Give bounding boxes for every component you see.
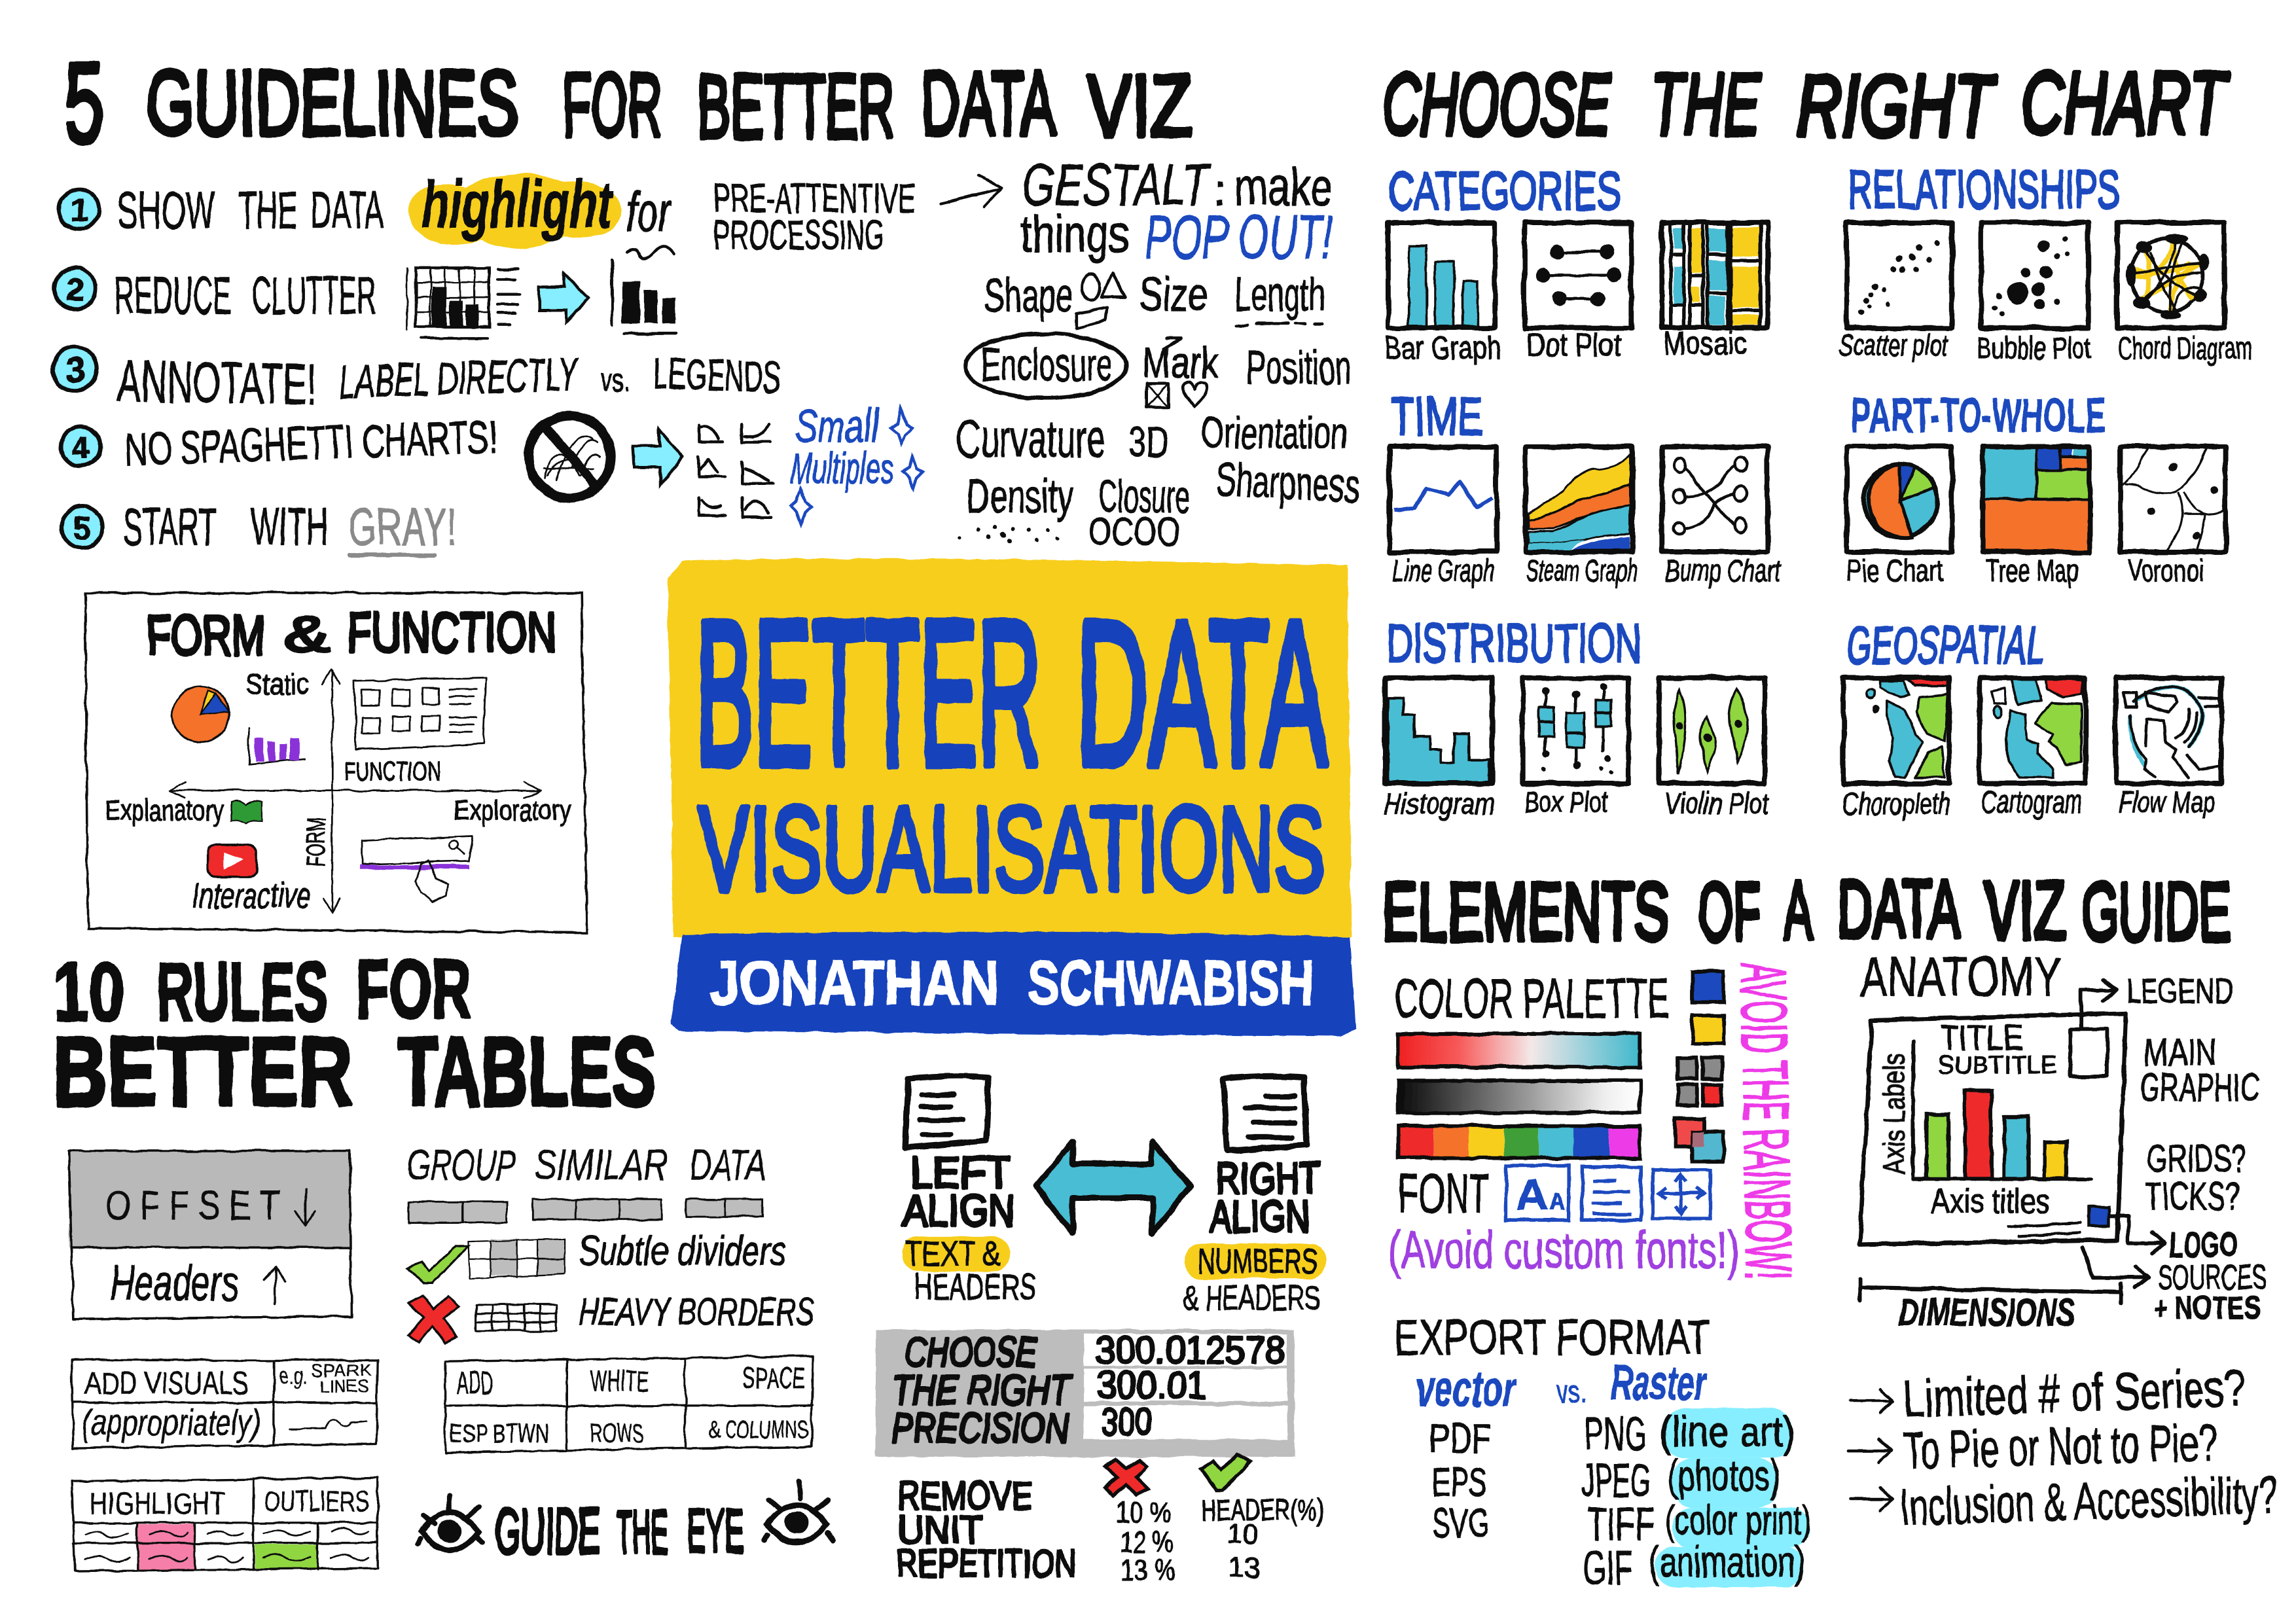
heading: 10 rules for better tables: FOR <box>356 943 471 1036</box>
heading: choose the right chart: RIGHT <box>1797 57 1997 155</box>
icon: text align box <box>1582 1167 1641 1220</box>
chart: violin plot: Violin Plot <box>1665 786 1770 821</box>
heading: choose the right chart: CHOOSE <box>1382 56 1611 154</box>
panel: form and function: FORM <box>302 817 331 866</box>
heading: 5 guidelines for better data viz: 5 <box>64 39 104 166</box>
chart: steam graph <box>1526 446 1637 588</box>
panel: guideline 1 show the data: THE <box>239 181 297 240</box>
text and icons: guide the eye: EYE <box>687 1496 744 1565</box>
panel: guideline 5 start with gray: 5 <box>73 510 91 546</box>
panel: guideline 3 annotate: ANNOTATE! <box>117 348 317 417</box>
text: gestalt make things pop out: GESTALT <box>1022 152 1211 217</box>
panel: guideline 3 annotate: LABEL DIRECTLY <box>338 348 581 409</box>
panel: choose the right precision <box>876 1329 1295 1457</box>
panel: right align: & HEADERS <box>1183 1278 1320 1317</box>
panel: export format: TIFF <box>1587 1499 1655 1551</box>
chart: scatter plot: Scatter plot <box>1839 328 1948 363</box>
heading: 5 guidelines for better data viz: BETTER <box>697 56 895 157</box>
panel: export format: (line art) <box>1659 1407 1795 1456</box>
panel: guideline 3 annotate: 3 <box>66 351 86 390</box>
panel: form and function: Exploratory <box>454 794 571 827</box>
yellow highlight <box>1185 1243 1326 1279</box>
icon: bar chart <box>249 728 304 764</box>
panel: group similar data: SIMILAR <box>535 1141 668 1190</box>
chart: line graph <box>1390 446 1496 588</box>
section: relationships: RELATIONSHIPS <box>1848 159 2121 220</box>
heading: 10 rules for better tables <box>53 943 656 1126</box>
chart: choropleth <box>1842 678 1950 821</box>
panel: guideline 2 reduce clutter: 2 <box>66 272 84 308</box>
panel: gestalt attributes: Mark <box>1142 338 1219 387</box>
panel: export format <box>1394 1310 1811 1595</box>
arrow: question 2 <box>1848 1439 1892 1463</box>
panel: anatomy of a chart: ANATOMY <box>1859 946 2062 1008</box>
mini table heavy <box>476 1304 556 1331</box>
chart: pie chart <box>1846 446 1952 588</box>
icon: search bar with hand <box>359 836 471 902</box>
chart: mosaic <box>1662 223 1767 361</box>
panel: offset headers <box>69 1150 351 1319</box>
heading: form and function: & <box>284 607 329 663</box>
author: SCHWABISH <box>1028 948 1314 1018</box>
panel: remove unit repetition: 13 <box>1229 1553 1259 1584</box>
table: add white space: & COLUMNS <box>709 1416 808 1444</box>
panel: choose the right precision: 300.01 <box>1097 1364 1206 1407</box>
heading: elements of a data viz guide: ELEMENTS <box>1382 866 1669 957</box>
table: add visuals: LINES <box>319 1377 369 1397</box>
panel: remove unit repetition: 10 % <box>1116 1497 1172 1529</box>
chart: bump chart <box>1662 446 1782 588</box>
panel: guideline 4 no spaghetti charts: 4 <box>72 429 90 465</box>
heading: 5 guidelines for better data viz: FOR <box>562 54 662 156</box>
panel: gestalt attributes: Length <box>1234 268 1325 321</box>
chart: box plot <box>1523 678 1628 819</box>
panel: form and function: FUNCTION <box>344 757 440 786</box>
text: pre-attentive processing: PROCESSING <box>713 212 884 258</box>
section: distribution <box>1384 613 1770 821</box>
text and icons: guide the eye: GUIDE <box>495 1495 600 1567</box>
chart outline <box>1859 1013 2126 1245</box>
table: highlight outliers <box>72 1477 378 1571</box>
text: pre-attentive processing: PRE-ATTENTIVE <box>713 175 915 221</box>
heading: form and function <box>147 602 556 667</box>
table: highlight outliers: OUTLIERS <box>264 1485 369 1518</box>
dimensions line <box>1860 1279 2121 1304</box>
arrow: to gestalt <box>942 175 1001 206</box>
panel: group similar data: DATA <box>690 1141 766 1190</box>
arrow: cyan spaghetti to small multiples <box>632 429 683 485</box>
text and icons: guide the eye: THE <box>617 1498 668 1567</box>
swatches <box>1675 971 1723 1161</box>
icon: red x <box>1105 1460 1148 1496</box>
chart: bar graph <box>1384 223 1501 366</box>
heading: form and function: FORM <box>147 605 265 667</box>
chart internals and call-outs <box>1860 1041 2267 1334</box>
heading: elements of a data viz guide: DATA <box>1838 863 1961 955</box>
heading: 5 guidelines for better data viz: VIZ <box>1086 57 1192 155</box>
section: time: TIME <box>1391 385 1483 446</box>
icon: density dots <box>958 525 1059 543</box>
panel: right align: ALIGN <box>1210 1192 1310 1241</box>
icon: move box <box>1653 1170 1710 1219</box>
panel: remove unit repetition: UNIT <box>897 1507 982 1552</box>
chart: bump chart: Bump Chart <box>1665 553 1782 588</box>
panel: gestalt attributes: Curvature <box>956 410 1105 469</box>
icon: font Aa box: A <box>1549 1188 1566 1215</box>
panel: guideline 2 reduce clutter <box>54 246 677 338</box>
section: part-to-whole: PART-TO-WHOLE <box>1851 388 2106 442</box>
text: avoid custom fonts: (Avoid custom fonts!) <box>1388 1221 1740 1279</box>
panel: guideline 5 start with gray <box>62 497 457 556</box>
panel: anatomy of a chart: TICKS? <box>2145 1175 2240 1218</box>
panel: guideline 3 annotate: vs. <box>600 362 630 398</box>
chart: voronoi <box>2121 446 2226 588</box>
panel: heavy borders: HEAVY BORDERS <box>579 1291 814 1334</box>
arrow: question 3 <box>1851 1488 1893 1511</box>
panel: choose the right precision: CHOOSE <box>905 1329 1037 1375</box>
icon: right aligned document <box>1223 1076 1307 1151</box>
text: gestalt make things pop out: things <box>1020 205 1129 264</box>
panel: form and function <box>85 593 587 933</box>
table: add visuals <box>72 1360 378 1448</box>
heading: elements of a data viz guide: OF <box>1698 866 1760 957</box>
blue author band <box>671 932 1356 1037</box>
arrow: to legend <box>2081 980 2116 1028</box>
panel: heavy borders <box>408 1291 814 1343</box>
chart: histogram <box>1384 678 1495 821</box>
squiggles <box>85 1529 369 1562</box>
panel: offset headers: O F F S E T <box>105 1183 279 1229</box>
panel: gestalt attributes: Enclosure <box>981 339 1113 391</box>
section: categories: CATEGORIES <box>1388 160 1621 221</box>
author <box>710 948 1314 1018</box>
yellow highlight <box>902 1236 1010 1272</box>
heading: choose the right chart <box>1382 54 2229 155</box>
panel: group similar data <box>407 1141 766 1222</box>
chart: mosaic: Mosaic <box>1664 325 1747 361</box>
chart: steam graph: Steam Graph <box>1526 553 1637 588</box>
chart internals and call-outs: Axis titles <box>1931 1182 2050 1220</box>
chart: voronoi: Voronoi <box>2128 553 2204 588</box>
icon: right eye <box>764 1482 833 1543</box>
chart: pie chart: Pie Chart <box>1846 553 1943 588</box>
chart: tree map: Tree Map <box>1986 553 2079 588</box>
table: add white space <box>445 1356 813 1452</box>
panel: guideline 1 show the data: 1 <box>70 192 88 228</box>
enclosure circle <box>965 334 1126 399</box>
icon: green check <box>1201 1454 1251 1491</box>
panel: choose the right precision: PRECISION <box>891 1406 1069 1452</box>
panel: export format: vs. <box>1556 1374 1586 1410</box>
panel: anatomy of a chart: GRIDS? <box>2147 1137 2246 1180</box>
icon: left aligned document <box>905 1076 989 1148</box>
chart: flow map: Flow Map <box>2119 785 2215 819</box>
panel: export format: PDF <box>1429 1416 1491 1461</box>
chart: chord diagram <box>2117 223 2252 365</box>
text and icons: guide the eye <box>418 1482 833 1567</box>
panel: guideline 3 annotate: LEGENDS <box>653 349 781 402</box>
panel: form and function: Explanatory <box>105 794 224 827</box>
yellow background <box>668 559 1352 937</box>
panel: remove unit repetition <box>896 1454 1323 1586</box>
table: add visuals: (appropriately) <box>82 1402 260 1443</box>
chart internals and call-outs: LOGO <box>2170 1225 2237 1264</box>
panel: export format: vector <box>1416 1361 1517 1417</box>
panel: central title block: DATA <box>1076 577 1329 808</box>
icon: font Aa box: A <box>1516 1170 1548 1219</box>
panel: guideline 1 show the data: DATA <box>310 181 384 240</box>
chart: dot plot: Dot Plot <box>1526 327 1621 363</box>
axes <box>170 669 541 912</box>
panel: colour palette: COLOR PALETTE <box>1394 968 1669 1030</box>
panel: gestalt attributes: Orientation <box>1201 409 1347 458</box>
panel: guideline 1 show the data <box>60 166 672 249</box>
panel: export format: (color print) <box>1665 1498 1811 1544</box>
panel: remove unit repetition: 10 <box>1227 1519 1258 1550</box>
icon: marks <box>1147 338 1208 407</box>
panel: colour palette <box>1388 963 1805 1280</box>
icon: pie chart <box>173 687 228 742</box>
panel: anatomy of a chart: TITLE <box>1940 1018 2024 1058</box>
chart: flow map <box>2116 678 2221 819</box>
section: categories <box>1384 160 1767 366</box>
panel: gestalt attributes: Sharpness <box>1215 453 1361 513</box>
panel: remove unit repetition: HEADER(%) <box>1201 1493 1323 1526</box>
heading: 5 guidelines for better data viz: GUIDELINES <box>147 51 518 154</box>
font row <box>1398 1163 1710 1225</box>
panel: export format: (photos) <box>1668 1452 1780 1501</box>
icon: no spaghetti symbol <box>529 416 611 498</box>
section: geospatial <box>1842 616 2221 821</box>
icon: left eye <box>418 1495 482 1550</box>
chart: cartogram: Cartogram <box>1981 785 2082 819</box>
panel: gestalt attributes: Density <box>967 471 1073 523</box>
table: add white space: WHITE <box>590 1364 649 1397</box>
panel: guideline 5 start with gray: WITH <box>251 497 328 556</box>
panel: gestalt attributes: Size <box>1139 268 1208 321</box>
panel: choose the right precision: 300 <box>1101 1401 1153 1444</box>
title: visualisations: VISUALISATIONS <box>698 781 1325 916</box>
section: part-to-whole <box>1846 388 2226 588</box>
panel: remove unit repetition: REMOVE <box>897 1474 1032 1518</box>
white cells <box>1084 1334 1287 1439</box>
arrow: cyan clutter to clean <box>539 274 588 322</box>
chart: bubble plot <box>1977 223 2091 365</box>
chart internals and call-outs: + NOTES <box>2153 1290 2261 1326</box>
panel: guideline 4 no spaghetti charts: NO SPAGHETTI CHARTS! <box>124 411 498 476</box>
heading: 10 rules for better tables: RULES <box>156 946 328 1039</box>
panel: export format: Raster <box>1611 1355 1708 1411</box>
heading: 5 guidelines for better data viz: DATA <box>921 53 1056 154</box>
cyan highlights <box>1655 1408 1810 1587</box>
panel: guideline 3 annotate <box>53 347 781 417</box>
text: gestalt make things pop out: make <box>1234 158 1333 217</box>
mini table subtle <box>469 1239 565 1278</box>
panel: anatomy of a chart <box>1859 946 2267 1334</box>
panel: right align <box>1183 1076 1326 1317</box>
sparkline <box>289 1420 366 1429</box>
heading: elements of a data viz guide: A <box>1784 865 1813 956</box>
panel: left align: ALIGN <box>902 1186 1016 1236</box>
arrow: to sources <box>2083 1248 2149 1288</box>
panel: export format: (animation) <box>1649 1538 1806 1587</box>
panel: form and function: Static <box>246 668 309 700</box>
panel: remove unit repetition: REPETITION <box>896 1541 1076 1586</box>
text: gestalt make things pop out: POP OUT! <box>1145 202 1333 271</box>
arrow: offset down <box>296 1189 315 1226</box>
heading: elements of a data viz guide <box>1382 863 2230 957</box>
table: add white space: ROWS <box>590 1419 644 1448</box>
panel: export format: EXPORT FORMAT <box>1394 1310 1710 1365</box>
panel: export format: EPS <box>1432 1459 1486 1505</box>
panel: export format: SVG <box>1432 1501 1489 1546</box>
panel: gestalt attributes: Position <box>1246 342 1352 394</box>
heading: 10 rules for better tables: 10 <box>53 946 124 1039</box>
panel: guideline 1 show the data: for <box>627 181 672 243</box>
panel: left align: LEFT <box>910 1149 1011 1198</box>
text: small multiples: Small <box>795 401 880 453</box>
panel: questions list <box>1848 1358 2278 1537</box>
icon: red x <box>408 1296 458 1343</box>
icon: clean bar chart <box>612 246 677 334</box>
table: add visuals: e.g. <box>278 1363 308 1389</box>
panel: group similar data: GROUP <box>407 1141 516 1190</box>
icon: play button <box>208 845 257 877</box>
text: small multiples <box>791 401 922 524</box>
panel: choose the right precision: THE RIGHT <box>891 1368 1072 1414</box>
legend box <box>2070 1029 2107 1076</box>
panel: left align: HEADERS <box>914 1266 1036 1308</box>
icon: cluttered chart <box>407 268 520 338</box>
icon: small multiple charts <box>698 425 773 517</box>
text: gestalt make things pop out <box>1020 152 1333 271</box>
panel: guideline 2 reduce clutter: REDUCE <box>115 266 231 325</box>
panel: right align: NUMBERS <box>1198 1241 1318 1281</box>
panel: central title block <box>668 559 1356 1037</box>
icon: dashboard <box>354 678 486 749</box>
heading: form and function: FUNCTION <box>347 602 556 664</box>
chart: histogram: Histogram <box>1384 786 1495 821</box>
chart: box plot: Box Plot <box>1524 785 1609 819</box>
chart: line graph: Line Graph <box>1393 553 1495 588</box>
heading: 5 guidelines for better data viz <box>64 39 1192 166</box>
chart: violin plot <box>1659 678 1770 821</box>
table: add white space: ESP BTWN <box>450 1419 549 1448</box>
chart: scatter plot <box>1839 223 1952 363</box>
panel: right align: RIGHT <box>1215 1154 1320 1204</box>
icon: green check <box>407 1246 469 1283</box>
chart: dot plot <box>1524 223 1631 363</box>
grouped grey bars <box>408 1199 763 1222</box>
panel: guideline 4 no spaghetti charts <box>61 401 922 524</box>
panel: guideline 5 start with gray: GRAY! <box>348 497 457 556</box>
panel: anatomy of a chart: LEGEND <box>2126 972 2233 1011</box>
heading: 10 rules for better tables: BETTER <box>53 1016 353 1126</box>
panel: guideline 1 show the data: SHOW <box>117 181 215 240</box>
section: geospatial: GEOSPATIAL <box>1846 616 2044 675</box>
panel: gestalt attributes <box>956 268 1361 553</box>
text: small multiples: Multiples <box>791 444 893 493</box>
arrow: to logo <box>2111 1215 2165 1254</box>
panel: left align: TEXT & <box>905 1234 1001 1274</box>
text: pre-attentive processing <box>713 175 915 258</box>
table: highlight outliers: HIGHLIGHT <box>89 1486 226 1520</box>
colour bar: rainbow <box>1399 1126 1640 1158</box>
panel: export format: PNG <box>1585 1408 1647 1460</box>
panel: gestalt attributes: OCOO <box>1088 508 1180 553</box>
section: time <box>1390 385 1782 588</box>
text: gestalt make things pop out: : <box>1214 166 1226 215</box>
panel: subtle dividers <box>407 1228 786 1283</box>
panel: export format: GIF <box>1583 1543 1633 1595</box>
chart: bar graph: Bar Graph <box>1384 330 1501 366</box>
icon: font Aa box <box>1505 1166 1569 1220</box>
panel: form and function: Interactive <box>192 876 310 916</box>
panel: remove unit repetition: 12 % <box>1120 1525 1173 1558</box>
heading: choose the right chart: THE <box>1650 56 1761 154</box>
panel: subtle dividers: Subtle dividers <box>579 1228 786 1274</box>
section: relationships <box>1839 159 2252 365</box>
arrow: headers up <box>264 1266 285 1303</box>
panel: anatomy of a chart: MAIN <box>2144 1030 2217 1075</box>
heading: elements of a data viz guide: VIZ <box>1984 865 2066 956</box>
panel: gestalt attributes: Shape <box>984 270 1073 323</box>
gradient bar: black to white <box>1399 1080 1640 1113</box>
panel: guideline 1 show the data: highlight <box>422 166 614 241</box>
author: JONATHAN <box>710 948 999 1018</box>
chart: tree map <box>1982 446 2090 588</box>
icon: green book <box>231 802 262 823</box>
logo square and source lines <box>2007 1207 2109 1236</box>
panel: left align <box>902 1076 1036 1308</box>
section: distribution: DISTRIBUTION <box>1387 613 1641 673</box>
panel: choose the right precision: 300.012578 <box>1095 1329 1285 1372</box>
chart internals and call-outs: Axis Labels <box>1878 1054 1911 1174</box>
bar chart <box>1913 1041 2091 1179</box>
icon: shapes <box>1076 272 1124 328</box>
table: add white space: ADD <box>457 1365 493 1401</box>
panel: gestalt attributes: 3D <box>1129 418 1168 467</box>
title: better data: BETTER <box>696 577 1041 808</box>
chart: bubble plot: Bubble Plot <box>1977 330 2091 365</box>
panel: offset headers: Headers <box>110 1256 239 1311</box>
table: add white space: SPACE <box>742 1362 805 1395</box>
arrow: question 1 <box>1851 1389 1893 1413</box>
chart internals and call-outs: DIMENSIONS <box>1899 1290 2075 1334</box>
heading: 10 rules for better tables: TABLES <box>399 1016 656 1126</box>
table: add visuals: ADD VISUALS <box>85 1365 249 1401</box>
table: add visuals: SPARK <box>310 1361 372 1380</box>
panel: guideline 5 start with gray: START <box>123 497 217 556</box>
panel: remove unit repetition: 13 % <box>1120 1554 1176 1586</box>
gradient bar: red to teal <box>1399 1034 1640 1067</box>
panel: gestalt attributes: Closure <box>1098 471 1191 523</box>
chart: choropleth: Choropleth <box>1842 786 1950 821</box>
panel: export format: JPEG <box>1581 1454 1650 1507</box>
chart: cartogram <box>1980 678 2085 819</box>
panel: guideline 2 reduce clutter: CLUTTER <box>252 266 376 325</box>
panel: anatomy of a chart: SUBTITLE <box>1937 1052 2057 1079</box>
arrow: double headed teal <box>1036 1142 1191 1233</box>
font row: FONT <box>1398 1163 1490 1225</box>
